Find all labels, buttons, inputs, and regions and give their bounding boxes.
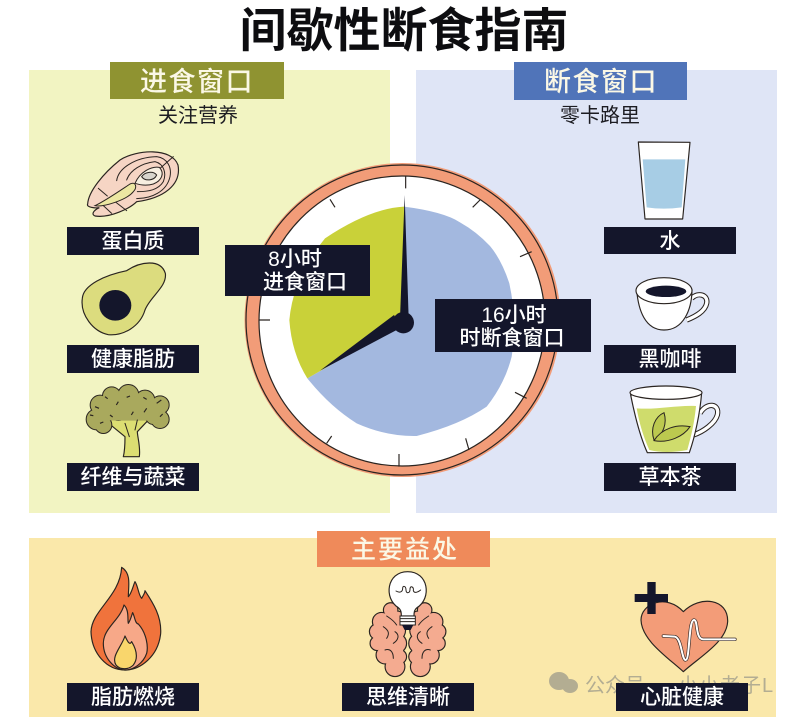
clock face <box>244 163 560 477</box>
label: healthy fats <box>67 345 199 373</box>
heading: fasting window <box>514 62 687 100</box>
label: protein <box>67 227 199 255</box>
clock segment: 8-hour eating <box>289 207 404 378</box>
heading: key benefits: 主要益处 <box>351 536 459 564</box>
subheading: zero calories: 零卡路里 <box>560 104 640 127</box>
label: herbal tea <box>604 463 736 491</box>
callout: 16-hour fasting window: 16小时 <box>481 304 547 327</box>
icon: avocado <box>82 263 165 335</box>
label: fiber and vegetables: 纤维与蔬菜 <box>80 466 186 489</box>
chart: fasting clock <box>225 163 591 477</box>
clock hands <box>320 195 414 371</box>
label: mental clarity <box>342 683 474 711</box>
label: fat burning: 脂肪燃烧 <box>91 686 175 709</box>
callout: 8-hour eating window: 进食窗口 <box>263 271 347 294</box>
label: black coffee <box>604 345 736 373</box>
label: water: 水 <box>660 230 680 253</box>
icon: black coffee <box>636 278 707 330</box>
label: black coffee: 黑咖啡 <box>638 348 702 371</box>
icon: salmon <box>87 152 178 216</box>
icon: glass of water <box>638 142 690 219</box>
heading: eating window: 进食窗口 <box>140 67 254 97</box>
panel: key benefits <box>29 531 776 717</box>
panel: eating window <box>29 62 390 513</box>
label: heart health <box>616 683 748 711</box>
clock segment: 16-hour fasting <box>307 207 514 436</box>
icon: flame <box>91 567 161 670</box>
icon: broccoli <box>87 385 169 457</box>
watermark: 公众号 <box>585 674 645 697</box>
label: fiber and vegetables <box>67 463 199 491</box>
heading: eating window <box>110 62 284 99</box>
subheading: focus on nutrition: 关注营养 <box>158 104 238 127</box>
label: water <box>604 227 736 254</box>
callout: 16-hour fasting window: 时断食窗口 <box>460 327 564 350</box>
icon: herbal tea <box>630 386 718 453</box>
label: herbal tea: 草本茶 <box>638 466 702 489</box>
watermark <box>549 672 774 697</box>
label: mental clarity: 思维清晰 <box>366 686 450 709</box>
heading: key benefits <box>317 531 490 567</box>
callout: 8-hour eating window: 8小时 <box>268 248 322 271</box>
callout: 8-hour eating window <box>225 245 370 296</box>
label: heart health: 心脏健康 <box>640 686 724 709</box>
title: 间歇性断食指南 <box>240 4 568 57</box>
icon: heart with pulse <box>635 582 735 672</box>
watermark: 小小老子L <box>678 674 774 697</box>
label: healthy fats: 健康脂肪 <box>91 348 175 371</box>
label: fat burning <box>67 683 199 711</box>
label: protein: 蛋白质 <box>102 230 164 253</box>
heading: fasting window: 断食窗口 <box>544 67 658 97</box>
panel: fasting window <box>416 62 777 513</box>
icon: brain with light bulb <box>370 572 445 676</box>
callout: 16-hour fasting window <box>435 299 591 352</box>
